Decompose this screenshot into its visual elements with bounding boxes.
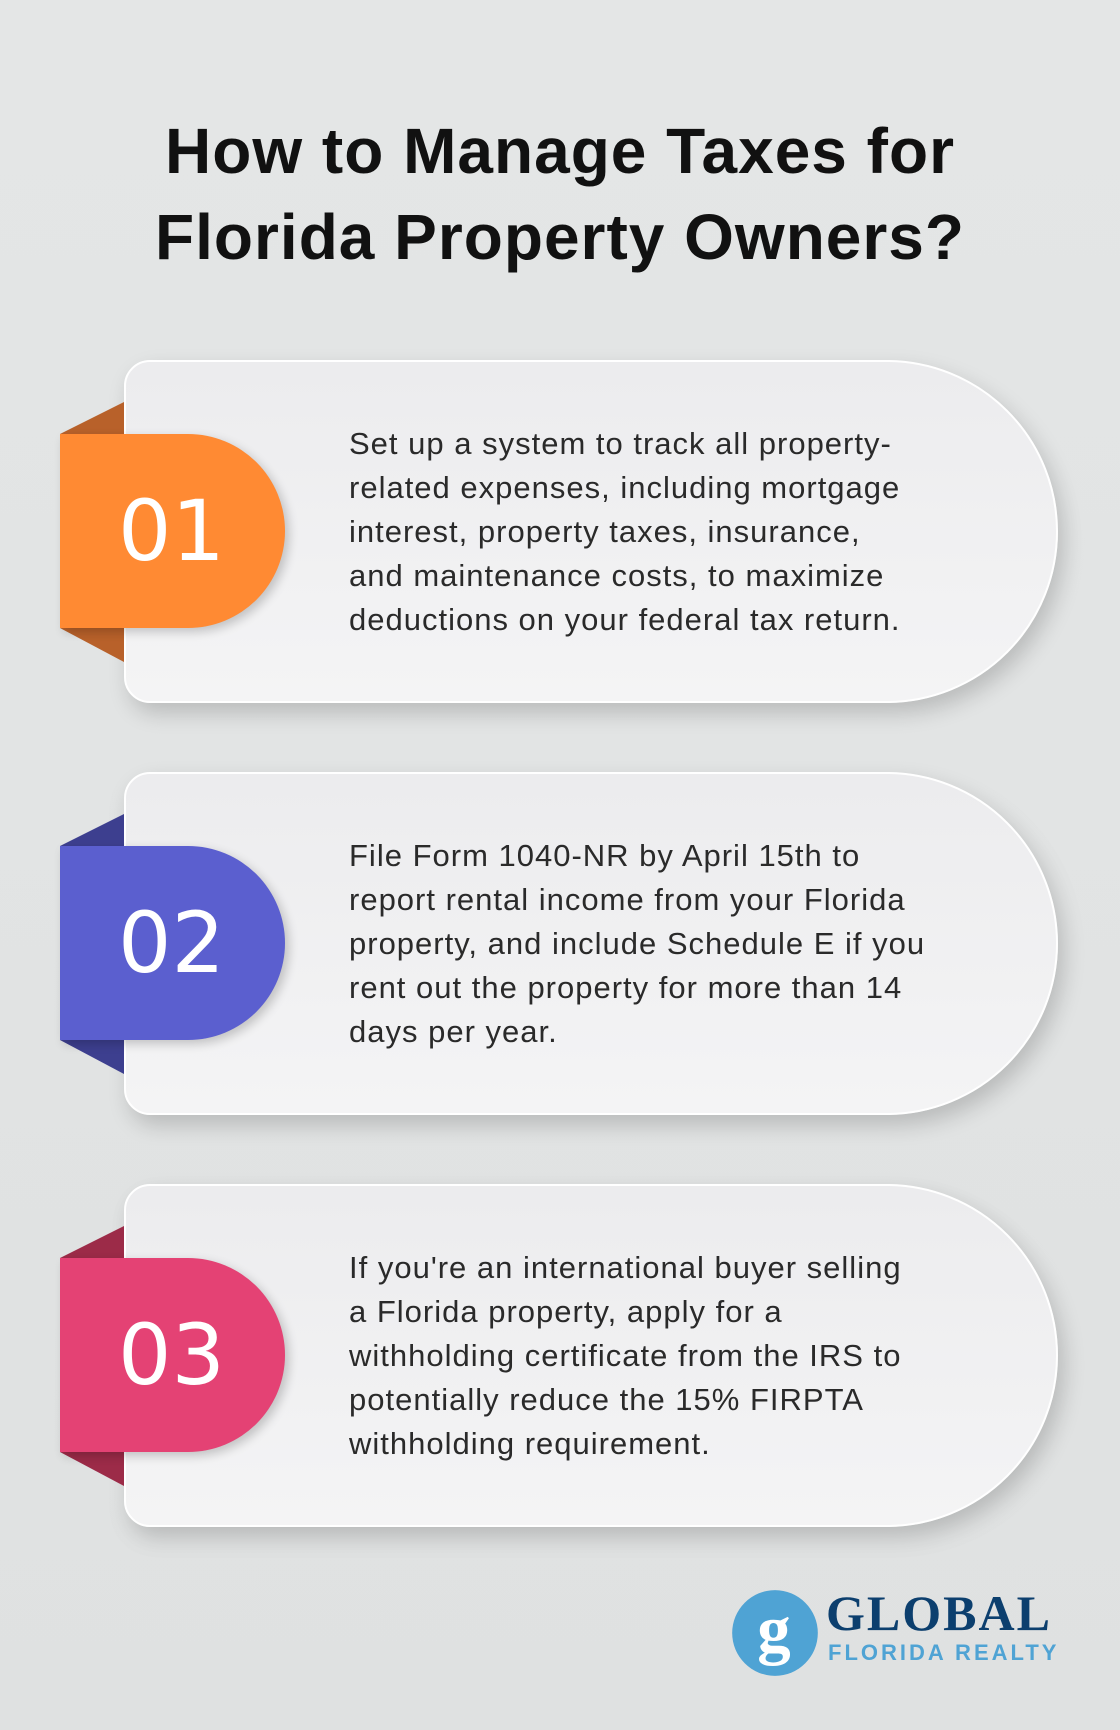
text 1: interest, property taxes, insurance, bbox=[349, 514, 861, 549]
card 2 bbox=[124, 772, 1058, 1115]
card 1 bbox=[124, 360, 1058, 703]
text 3: a Florida property, apply for a bbox=[349, 1294, 783, 1329]
text 2: days per year. bbox=[349, 1014, 558, 1049]
flap 3 bbox=[60, 1226, 124, 1486]
text 3 bbox=[349, 1250, 902, 1461]
flap 1 bbox=[60, 402, 124, 662]
panel: step 3 bbox=[60, 1184, 1072, 1546]
logo bbox=[732, 1585, 1059, 1676]
logo icon bbox=[732, 1590, 818, 1676]
flap 2 bbox=[60, 814, 124, 1074]
text 2: report rental income from your Florida bbox=[349, 882, 906, 917]
title: How to Manage Taxes for bbox=[165, 115, 955, 187]
title bbox=[155, 115, 965, 273]
badge 02: 02 bbox=[118, 894, 225, 992]
text 1 bbox=[349, 426, 901, 637]
text 1: deductions on your federal tax return. bbox=[349, 602, 901, 637]
text 1: related expenses, including mortgage bbox=[349, 470, 900, 505]
title: Florida Property Owners? bbox=[155, 201, 965, 273]
badge 01 bbox=[60, 434, 285, 628]
text 1: and maintenance costs, to maximize bbox=[349, 558, 884, 593]
panel: step 2 bbox=[60, 772, 1073, 1134]
text 3: withholding requirement. bbox=[349, 1426, 711, 1461]
text 2: File Form 1040-NR by April 15th to bbox=[349, 838, 860, 873]
text 2 bbox=[349, 838, 925, 1049]
text 2: rent out the property for more than 14 bbox=[349, 970, 902, 1005]
text 3: If you're an international buyer selling bbox=[349, 1250, 902, 1285]
badge 01: 01 bbox=[118, 482, 225, 580]
text 3: withholding certificate from the IRS to bbox=[349, 1338, 901, 1373]
badge 03: 03 bbox=[118, 1306, 225, 1404]
panel: step 1 bbox=[60, 360, 1073, 722]
logo icon: g bbox=[757, 1592, 791, 1666]
badge 02 bbox=[60, 846, 285, 1040]
text 2: property, and include Schedule E if you bbox=[349, 926, 925, 961]
logo: FLORIDA REALTY bbox=[828, 1640, 1059, 1665]
text 1: Set up a system to track all property- bbox=[349, 426, 892, 461]
text 3: potentially reduce the 15% FIRPTA bbox=[349, 1382, 864, 1417]
badge 03 bbox=[60, 1258, 285, 1452]
logo text: GLOBAL bbox=[826, 1585, 1052, 1641]
card 3 bbox=[124, 1184, 1058, 1527]
